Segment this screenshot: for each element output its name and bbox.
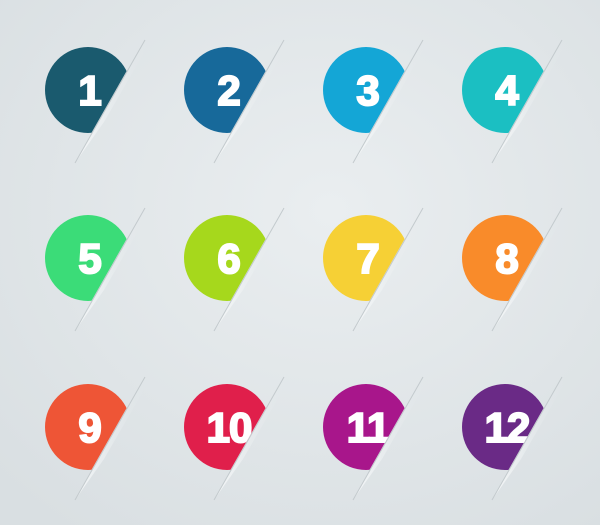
badge 1 — [45, 40, 148, 163]
badge 2: 2 — [217, 67, 241, 114]
badge 4 — [462, 40, 565, 163]
badge 12: 12 — [485, 404, 529, 451]
badge 10: 10 — [207, 404, 251, 451]
badge 10 — [184, 377, 287, 500]
badge 9 — [45, 377, 148, 500]
badge 1: 1 — [78, 67, 102, 114]
badge 8: 8 — [495, 235, 519, 282]
badge 12 — [462, 377, 565, 500]
badge 11 — [323, 377, 426, 500]
badge 9: 9 — [78, 404, 102, 451]
badge 5: 5 — [78, 235, 102, 282]
badge 3 — [323, 40, 426, 163]
badge 6: 6 — [217, 235, 241, 282]
badge 8 — [462, 208, 565, 331]
badge 3: 3 — [356, 67, 380, 114]
badge 2 — [184, 40, 287, 163]
badge 7: 7 — [356, 235, 380, 282]
badge 6 — [184, 208, 287, 331]
badge 11: 11 — [347, 404, 390, 451]
badge 7 — [323, 208, 426, 331]
badge 4: 4 — [495, 67, 519, 114]
badge 5 — [45, 208, 148, 331]
